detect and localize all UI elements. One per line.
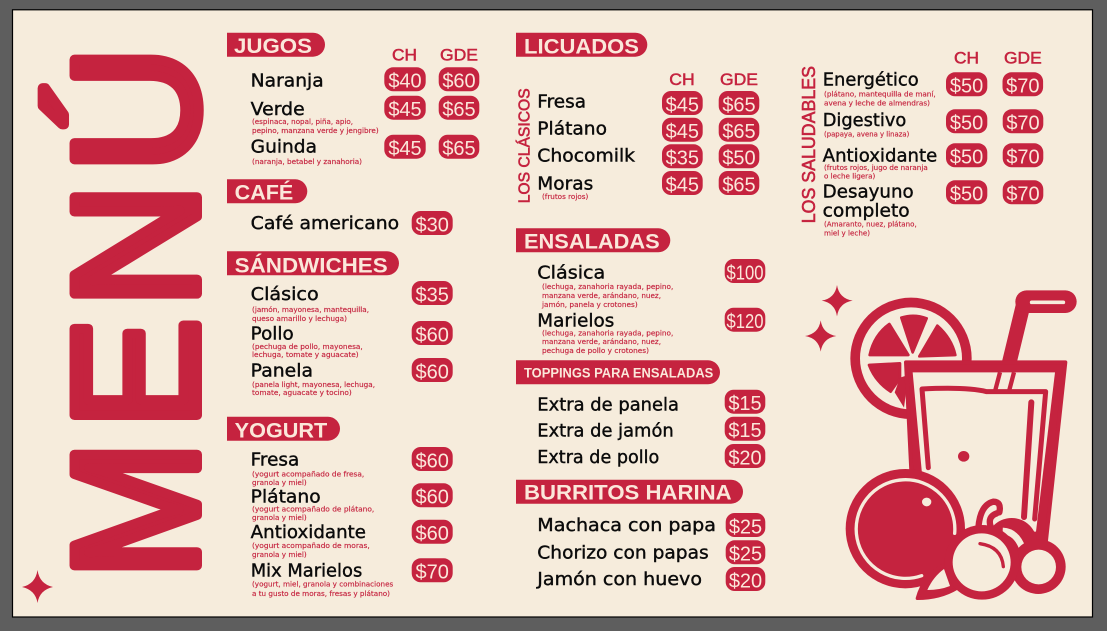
item: Clásico [251, 281, 453, 323]
item: Café americano [251, 211, 453, 236]
item: Marielos: manzana verde, arándano, nuez, [542, 338, 661, 346]
item: Chocomilk: Chocomilk [537, 146, 636, 167]
item: Guinda [251, 135, 479, 166]
item: Extra de pollo: $20 [728, 447, 762, 469]
item: Plátano: $45 [666, 121, 699, 143]
item: Marielos: $120 [726, 311, 764, 333]
item: Verde: $65 [442, 99, 476, 121]
item: Energético: Energético [823, 70, 919, 91]
heading: CAFÉ [227, 179, 307, 204]
item: Chocomilk: $50 [722, 148, 756, 170]
panel: toppings [516, 360, 765, 469]
item: Digestivo: $70 [1006, 113, 1040, 135]
item: Digestivo: $50 [950, 113, 983, 135]
item: Panela: Panela [251, 361, 313, 382]
item: Fresa: $65 [722, 94, 756, 116]
item: Verde: Verde [251, 99, 305, 120]
item: Café americano: Café americano [251, 213, 399, 234]
item: Extra de jamón: $15 [728, 420, 762, 442]
item: Antioxidante [251, 520, 453, 559]
item: Antioxidante: granola y miel) [252, 551, 307, 559]
item: Clásica: Clásica [537, 262, 605, 283]
item: Fresa: $60 [416, 450, 449, 472]
item: Moras: $45 [666, 174, 699, 196]
item: Desayuno completo: Desayuno [823, 182, 914, 203]
item: Energético [823, 70, 1043, 107]
item: Clásico: Clásico [251, 284, 319, 305]
item: Extra de panela: $15 [728, 393, 762, 415]
heading: YOGURT: YOGURT [235, 419, 327, 442]
item: Fresa: $45 [666, 94, 699, 116]
heading: CAFÉ: CAFÉ [235, 181, 293, 204]
item: Chocomilk: $35 [666, 148, 699, 170]
item: Plátano: $65 [722, 121, 756, 143]
item: Moras: Moras [537, 173, 593, 194]
item: Guinda: Guinda [251, 137, 317, 158]
icon: citrus slice [850, 298, 972, 419]
item: Guinda: $65 [442, 138, 476, 160]
item: Plátano [251, 483, 453, 522]
item: Extra de pollo: Extra de pollo [537, 447, 659, 468]
item: Mix Marielos: $70 [416, 562, 449, 584]
title: MENÚ vertical [36, 46, 235, 579]
panel: jugos [227, 33, 479, 166]
item: Antioxidante [823, 143, 1043, 181]
heading: TOPPINGS PARA ENSALADAS [516, 360, 720, 384]
panel: yogurt [227, 417, 453, 598]
item: Antioxidante: (yogurt acompañado de moras, [252, 542, 370, 550]
item: Café americano: $30 [416, 214, 449, 236]
item: Jamón con huevo: Jamón con huevo [536, 569, 702, 590]
item: Chorizo con papas: Chorizo con papas [537, 542, 709, 563]
item: Plátano: Plátano [251, 487, 321, 508]
item: Marielos: pechuga de pollo y crotones) [542, 347, 649, 355]
illustration: juice glass with fruit and sparkles [805, 285, 1066, 600]
panel: licuados [516, 33, 759, 203]
item: Antioxidante: o leche ligera) [824, 173, 876, 181]
item: Moras: $65 [722, 174, 756, 196]
item: Plátano: $60 [416, 487, 449, 509]
item: Chorizo con papas: $25 [729, 544, 762, 566]
item: Antioxidante: (frutos rojos, jugo de naranja [824, 164, 928, 172]
heading: JUGOS [227, 33, 325, 58]
vertical label: LOS SALUDABLES: LOS SALUDABLES [798, 66, 819, 223]
item: Digestivo [823, 109, 1043, 139]
item: Extra de pollo [537, 444, 765, 469]
item: Naranja: $40 [388, 71, 422, 93]
item: Chorizo con papas [537, 540, 765, 566]
item: Desayuno completo: (Amaranto, nuez, plátano, [824, 221, 917, 229]
column label: GDE: GDE [1004, 49, 1042, 67]
heading: ENSALADAS: ENSALADAS [524, 230, 660, 253]
item: Energético: $70 [1006, 76, 1039, 98]
icon: straw [1009, 302, 1065, 362]
item: Pollo: lechuga, tomate y aguacate) [252, 351, 359, 359]
panel: burritos harina [516, 480, 765, 592]
item: Guinda: $45 [388, 138, 422, 160]
item: Plátano: (yogurt acompañado de plátano, [252, 506, 374, 514]
item: Clásica: manzana verde, arándano, nuez, [542, 292, 661, 300]
item: Clásica: jamón, panela y crotones) [541, 301, 638, 309]
item: Extra de panela: Extra de panela [537, 394, 679, 415]
item: Fresa [537, 91, 759, 116]
item: Plátano: granola y miel) [252, 514, 307, 522]
item: Marielos: Marielos [537, 311, 614, 332]
item: Chocomilk [537, 144, 759, 170]
column label: CH: CH [669, 71, 695, 89]
item: Energético: avena y leche de almendras) [824, 99, 930, 107]
item: Fresa: Fresa [537, 92, 586, 113]
item: Fresa: Fresa [251, 450, 299, 471]
item: Clásica: $100 [726, 262, 764, 284]
item: Extra de jamón [537, 417, 765, 442]
item: Desayuno completo [823, 180, 1043, 238]
item: Machaca con papa: Machaca con papa [537, 515, 716, 536]
item: Clásica: (lechuga, zanahoria rayada, pepino, [542, 283, 673, 291]
item: Marielos: (lechuga, zanahoria rayada, pepino, [542, 330, 673, 338]
heading: BURRITOS HARINA: BURRITOS HARINA [524, 482, 732, 505]
item: Naranja [251, 67, 479, 93]
item: Digestivo: (papaya, avena y linaza) [824, 131, 910, 139]
item: Mix Marielos: (yogurt, miel, granola y combinaciones [252, 581, 394, 589]
item: Desayuno completo: $70 [1006, 184, 1040, 206]
item: Antioxidante: $60 [416, 523, 449, 545]
item: Desayuno completo: completo [823, 201, 910, 222]
item: Energético: $50 [950, 76, 983, 98]
item: Extra de panela [537, 390, 765, 415]
item: Mix Marielos: a tu gusto de moras, fresas y plátano) [252, 590, 390, 598]
heading: TOPPINGS PARA ENSALADAS: TOPPINGS PARA ENSALADAS [524, 366, 713, 381]
item: Desayuno completo: $50 [950, 184, 983, 206]
item: Antioxidante: Antioxidante [251, 522, 366, 543]
item: Verde: pepino, manzana verde y jengibre) [252, 127, 379, 135]
item: Moras [537, 171, 759, 201]
title: MENÚ vertical: E [36, 318, 235, 429]
item: Antioxidante: $70 [1006, 147, 1040, 169]
item: Extra de jamón: Extra de jamón [537, 421, 674, 442]
item: Mix Marielos [251, 558, 453, 598]
item: Panela: $60 [416, 361, 449, 383]
item: Clásico: queso amarillo y lechuga) [252, 315, 347, 323]
heading: JUGOS: JUGOS [234, 35, 312, 58]
title: MENÚ vertical: M [36, 441, 235, 579]
icon: orange [846, 469, 965, 588]
column label: GDE: GDE [440, 47, 478, 65]
icon: star bottom left [22, 570, 53, 603]
icon: cherry stem [978, 502, 1000, 528]
item: Verde [251, 96, 479, 135]
item: Guinda: (naranja, betabel y zanahoria) [252, 158, 362, 166]
item: Machaca con papa [537, 513, 765, 538]
item: Panela: tomate, aguacate y tocino) [252, 389, 352, 397]
item: Plátano: Plátano [537, 119, 607, 140]
item: Antioxidante: $50 [950, 147, 983, 169]
item: Panela [251, 358, 453, 397]
heading: SÁNDWICHES: SÁNDWICHES [235, 255, 388, 278]
item: Naranja: Naranja [251, 71, 324, 92]
item: Panela: (panela light, mayonesa, lechuga, [252, 381, 375, 389]
item: Desayuno completo: miel y leche) [824, 230, 870, 238]
item: Verde: (espinaca, nopal, piña, apio, [252, 118, 353, 126]
column label: CH: CH [954, 49, 979, 67]
item: Antioxidante: Antioxidante [823, 146, 937, 167]
panel: ensaladas [516, 228, 765, 355]
item: Pollo: (pechuga de pollo, mayonesa, [252, 343, 363, 351]
item: Moras: (frutos rojos) [542, 193, 589, 201]
item: Clásico: (jamón, mayonesa, mantequilla, [252, 306, 369, 314]
panel: los saludables [798, 49, 1043, 238]
column label: GDE: GDE [720, 71, 758, 89]
panel: sándwiches [227, 251, 453, 397]
item: Marielos [537, 308, 765, 355]
item: Naranja: $60 [442, 71, 476, 93]
icon: sparkle top [822, 285, 853, 316]
item: Energético: (plátano, mantequilla de maní, [824, 91, 936, 99]
item: Mix Marielos: Mix Marielos [251, 561, 362, 582]
icon: leaf [917, 563, 957, 598]
item: Pollo: $60 [416, 324, 449, 346]
heading: LICUADOS: LICUADOS [524, 35, 639, 58]
item: Clásico: $35 [416, 284, 449, 306]
item: Jamón con huevo [536, 567, 765, 592]
column label: CH: CH [392, 47, 417, 65]
item: Fresa: granola y miel) [252, 479, 307, 487]
item: Machaca con papa: $25 [729, 516, 762, 538]
item: Digestivo: Digestivo [823, 110, 906, 131]
title: MENÚ vertical: Ú [36, 46, 235, 173]
vertical label: LOS CLÁSICOS: LOS CLÁSICOS [516, 88, 534, 203]
item: Clásica [537, 259, 765, 309]
icon: berries [945, 518, 1066, 600]
icon: sparkle lower [805, 320, 836, 352]
item: Pollo: Pollo [251, 324, 294, 345]
item: Pollo [251, 321, 453, 359]
item: Verde: $45 [388, 99, 422, 121]
panel: café [227, 179, 453, 236]
item: Fresa [251, 447, 453, 487]
item: Jamón con huevo: $20 [729, 570, 762, 592]
item: Fresa: (yogurt acompañado de fresa, [252, 471, 364, 479]
item: Plátano [537, 118, 759, 143]
icon: glass [906, 362, 1065, 547]
title: MENÚ vertical: N [36, 183, 235, 308]
